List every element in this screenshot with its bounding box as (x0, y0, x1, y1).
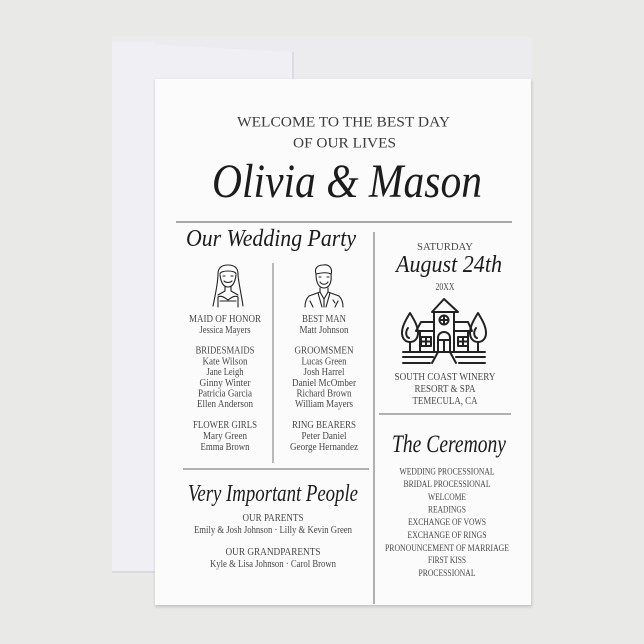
text block: right wedding party: RING BEARERS (292, 420, 356, 431)
text block: left wedding party: Ginny Winter (200, 378, 251, 389)
text block: left wedding party: BRIDESMAIDS (196, 346, 254, 356)
text block: ceremony order: EXCHANGE OF VOWS (408, 517, 486, 527)
text block: parents and grandparents (194, 513, 352, 570)
icon: bride (213, 265, 243, 307)
text block: venue: RESORT & SPA (414, 383, 476, 395)
heading: welcome (237, 114, 450, 152)
text block: ceremony order: FIRST KISS (428, 555, 466, 565)
text block: venue: SOUTH COAST WINERY (394, 371, 496, 383)
wedding card (155, 79, 531, 605)
text block: ceremony order: READINGS (428, 504, 466, 514)
date block (394, 242, 502, 293)
heading: very important people: Very Important People (188, 481, 358, 507)
heading: welcome: OF OUR LIVES (293, 136, 396, 152)
text block: left wedding party: Mary Green (203, 431, 247, 442)
text block: venue: TEMECULA, CA (412, 395, 478, 407)
text block: right wedding party: Matt Johnson (300, 325, 348, 336)
text block: ceremony order: PROCESSIONAL (418, 568, 476, 578)
text block: parents and grandparents: OUR GRANDPARENTS (226, 547, 320, 558)
text block: left wedding party: Kate Wilson (202, 356, 248, 368)
text block: right wedding party: Peter Daniel (302, 431, 347, 442)
text block: ceremony order: EXCHANGE OF RINGS (408, 530, 486, 540)
text block: ceremony order: WEDDING PROCESSIONAL (400, 466, 494, 476)
text block: left wedding party: Jane Leigh (206, 367, 244, 378)
text block: left wedding party: Patricia Garcia (198, 388, 253, 400)
text block: right wedding party: GROOMSMEN (294, 346, 354, 356)
icon: venue building (402, 299, 486, 363)
text block: left wedding party: Emma Brown (200, 442, 250, 453)
text block: ceremony order: PRONOUNCEMENT OF MARRIAGE (385, 543, 509, 553)
heading: welcome: WELCOME TO THE BEST DAY (237, 114, 450, 130)
text block: parents and grandparents: OUR PARENTS (242, 513, 304, 524)
text block: right wedding party: BEST MAN (302, 314, 346, 325)
text block: parents and grandparents: Kyle & Lisa Johnson · Carol Brown (210, 559, 336, 570)
text block: right wedding party: George Hernandez (290, 442, 359, 453)
text block: ceremony order: WELCOME (428, 492, 466, 502)
text block: ceremony order (385, 466, 509, 578)
text block: right wedding party: Josh Harrel (304, 367, 345, 378)
text block: right wedding party: William Mayers (295, 399, 353, 410)
text block: right wedding party: Richard Brown (296, 388, 352, 400)
envelope (112, 37, 532, 573)
text block: right wedding party: Daniel McOmber (292, 378, 357, 389)
text block: venue (394, 371, 496, 407)
title: couple names: Olivia & Mason (212, 155, 482, 208)
text block: left wedding party (189, 314, 261, 453)
text block: ceremony order: BRIDAL PROCESSIONAL (404, 479, 490, 489)
text block: right wedding party: Lucas Green (302, 356, 346, 368)
text block: left wedding party: MAID OF HONOR (189, 314, 261, 325)
text block: parents and grandparents: Emily & Josh Johnson · Lilly & Kevin Green (194, 525, 352, 536)
icon: groom (305, 265, 343, 307)
card shadow (155, 80, 532, 607)
date block: 20XX (436, 282, 455, 293)
text block: left wedding party: Jessica Mayers (200, 325, 251, 336)
date block: August 24th (394, 252, 502, 278)
text block: left wedding party: Ellen Anderson (197, 399, 253, 410)
heading: the ceremony: The Ceremony (392, 431, 507, 458)
date block: SATURDAY (417, 242, 473, 253)
heading: our wedding party: Our Wedding Party (186, 226, 356, 252)
text block: left wedding party: FLOWER GIRLS (193, 420, 257, 431)
text block: right wedding party (290, 314, 359, 453)
